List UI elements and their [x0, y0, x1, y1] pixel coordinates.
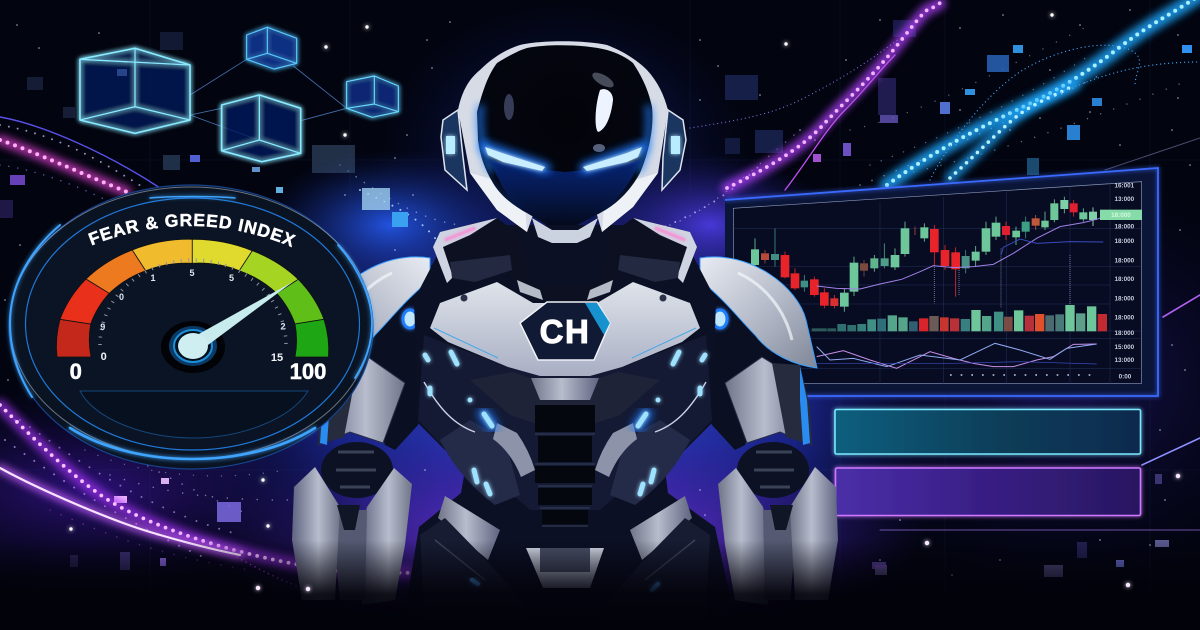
CH badge: CH: [540, 313, 590, 350]
cube center: [222, 95, 301, 162]
torso panels: [418, 335, 712, 526]
price axis labels: 15:000: [1114, 344, 1135, 351]
thighs: [420, 518, 530, 630]
forearm: [718, 468, 770, 605]
price axis labels: 18:000: [1114, 295, 1135, 302]
ear right: [662, 110, 686, 190]
eyes: [485, 147, 545, 171]
oscillator: [817, 343, 1097, 375]
needle: [197, 282, 293, 345]
price tag: [1100, 210, 1142, 220]
price axis labels: 18:000: [1114, 257, 1135, 264]
chart panel: [725, 168, 1158, 396]
tick marks: [100, 260, 286, 345]
price axis labels: 16:001: [1114, 182, 1135, 189]
dial numbers: 9: [100, 322, 105, 332]
dial numbers: 5: [229, 273, 234, 283]
bottom fade: [0, 540, 1200, 630]
blank teal panel: [835, 410, 1140, 454]
shoulder light: [713, 310, 727, 328]
volume bars: [812, 305, 1107, 331]
dashed verticals: [934, 248, 1070, 308]
blue stream upper right: [887, 0, 1200, 185]
ear left: [441, 110, 467, 190]
price axis labels: 18:000: [1114, 224, 1135, 231]
grid: [733, 183, 1142, 383]
price axis labels: 18:000: [1114, 276, 1135, 283]
small scale ends: [101, 351, 283, 364]
gauge body: [9, 185, 373, 469]
chest glowing pills: [484, 414, 646, 426]
price axis labels: 13:000: [1114, 357, 1135, 364]
chart area in zoom coordinates: [733, 182, 1142, 383]
blank purple panel: [836, 468, 1140, 516]
chart area in zoom coordinates: 18:000: [1111, 212, 1131, 219]
price axis labels: [1114, 182, 1135, 380]
hub: [161, 321, 225, 373]
thin purple accents right: [880, 295, 1200, 530]
helmet: [441, 41, 686, 243]
CH badge: [520, 302, 610, 360]
small scale ends: 15: [271, 352, 283, 364]
collars: [433, 218, 697, 300]
upper arm: [725, 357, 812, 445]
price axis labels: 18:000: [1114, 238, 1135, 245]
fear and greed gauge: [6, 184, 376, 470]
price axis labels: 0:00: [1119, 373, 1132, 380]
dial numbers: 2: [280, 322, 286, 332]
cube top: [247, 27, 297, 69]
bright stars: [71, 15, 1052, 529]
rib right: [595, 423, 637, 477]
shell: [458, 41, 668, 232]
dial numbers: 0: [119, 292, 124, 302]
visor blue sides: [480, 105, 649, 172]
scale end labels: 100: [290, 359, 326, 384]
lower glowing particles: [258, 476, 1178, 589]
dial numbers: [100, 268, 286, 332]
price axis labels: 18:000: [1114, 314, 1135, 321]
dial numbers: 5: [189, 268, 195, 278]
small scale ends: 0: [101, 351, 107, 363]
moving average lines: [817, 215, 1108, 289]
pink stream upper left: [0, 117, 160, 192]
hip guards: [438, 496, 500, 560]
rib left: [493, 423, 535, 477]
purple stream upper right: [690, 3, 940, 190]
cube large: [80, 48, 190, 133]
purple stream lower left: [0, 405, 410, 597]
price axis labels: 18:000: [1114, 330, 1135, 337]
eye halos: [485, 147, 642, 168]
dial numbers: 1: [150, 273, 156, 283]
belt buckle: [526, 548, 604, 588]
robot: [292, 41, 838, 630]
right arm: [690, 257, 838, 605]
shoulder pad: [700, 257, 817, 368]
panel corner lights: [1156, 168, 1160, 396]
colored scale: [56, 239, 329, 357]
scale end labels: [70, 359, 326, 384]
visor lower mask: [490, 160, 640, 225]
network links: [190, 59, 347, 140]
elbow: [737, 442, 809, 498]
chest plate: [430, 282, 700, 376]
scale end labels: 0: [70, 359, 82, 384]
deltoid: [690, 262, 775, 450]
blockchain network of wireframe cubes: [80, 27, 398, 162]
price axis labels: 13:000: [1114, 196, 1135, 203]
chin guard: [532, 218, 598, 243]
gauge title: FEAR & GREED INDEX: [88, 214, 296, 248]
left arm: [292, 257, 440, 605]
visor: [477, 45, 652, 225]
visor reflections: [596, 89, 613, 132]
bright ring arcs: [10, 196, 372, 459]
torso: [395, 225, 735, 630]
chest lights: [425, 352, 705, 494]
candlesticks: [751, 197, 1097, 312]
cube right: [347, 76, 398, 117]
